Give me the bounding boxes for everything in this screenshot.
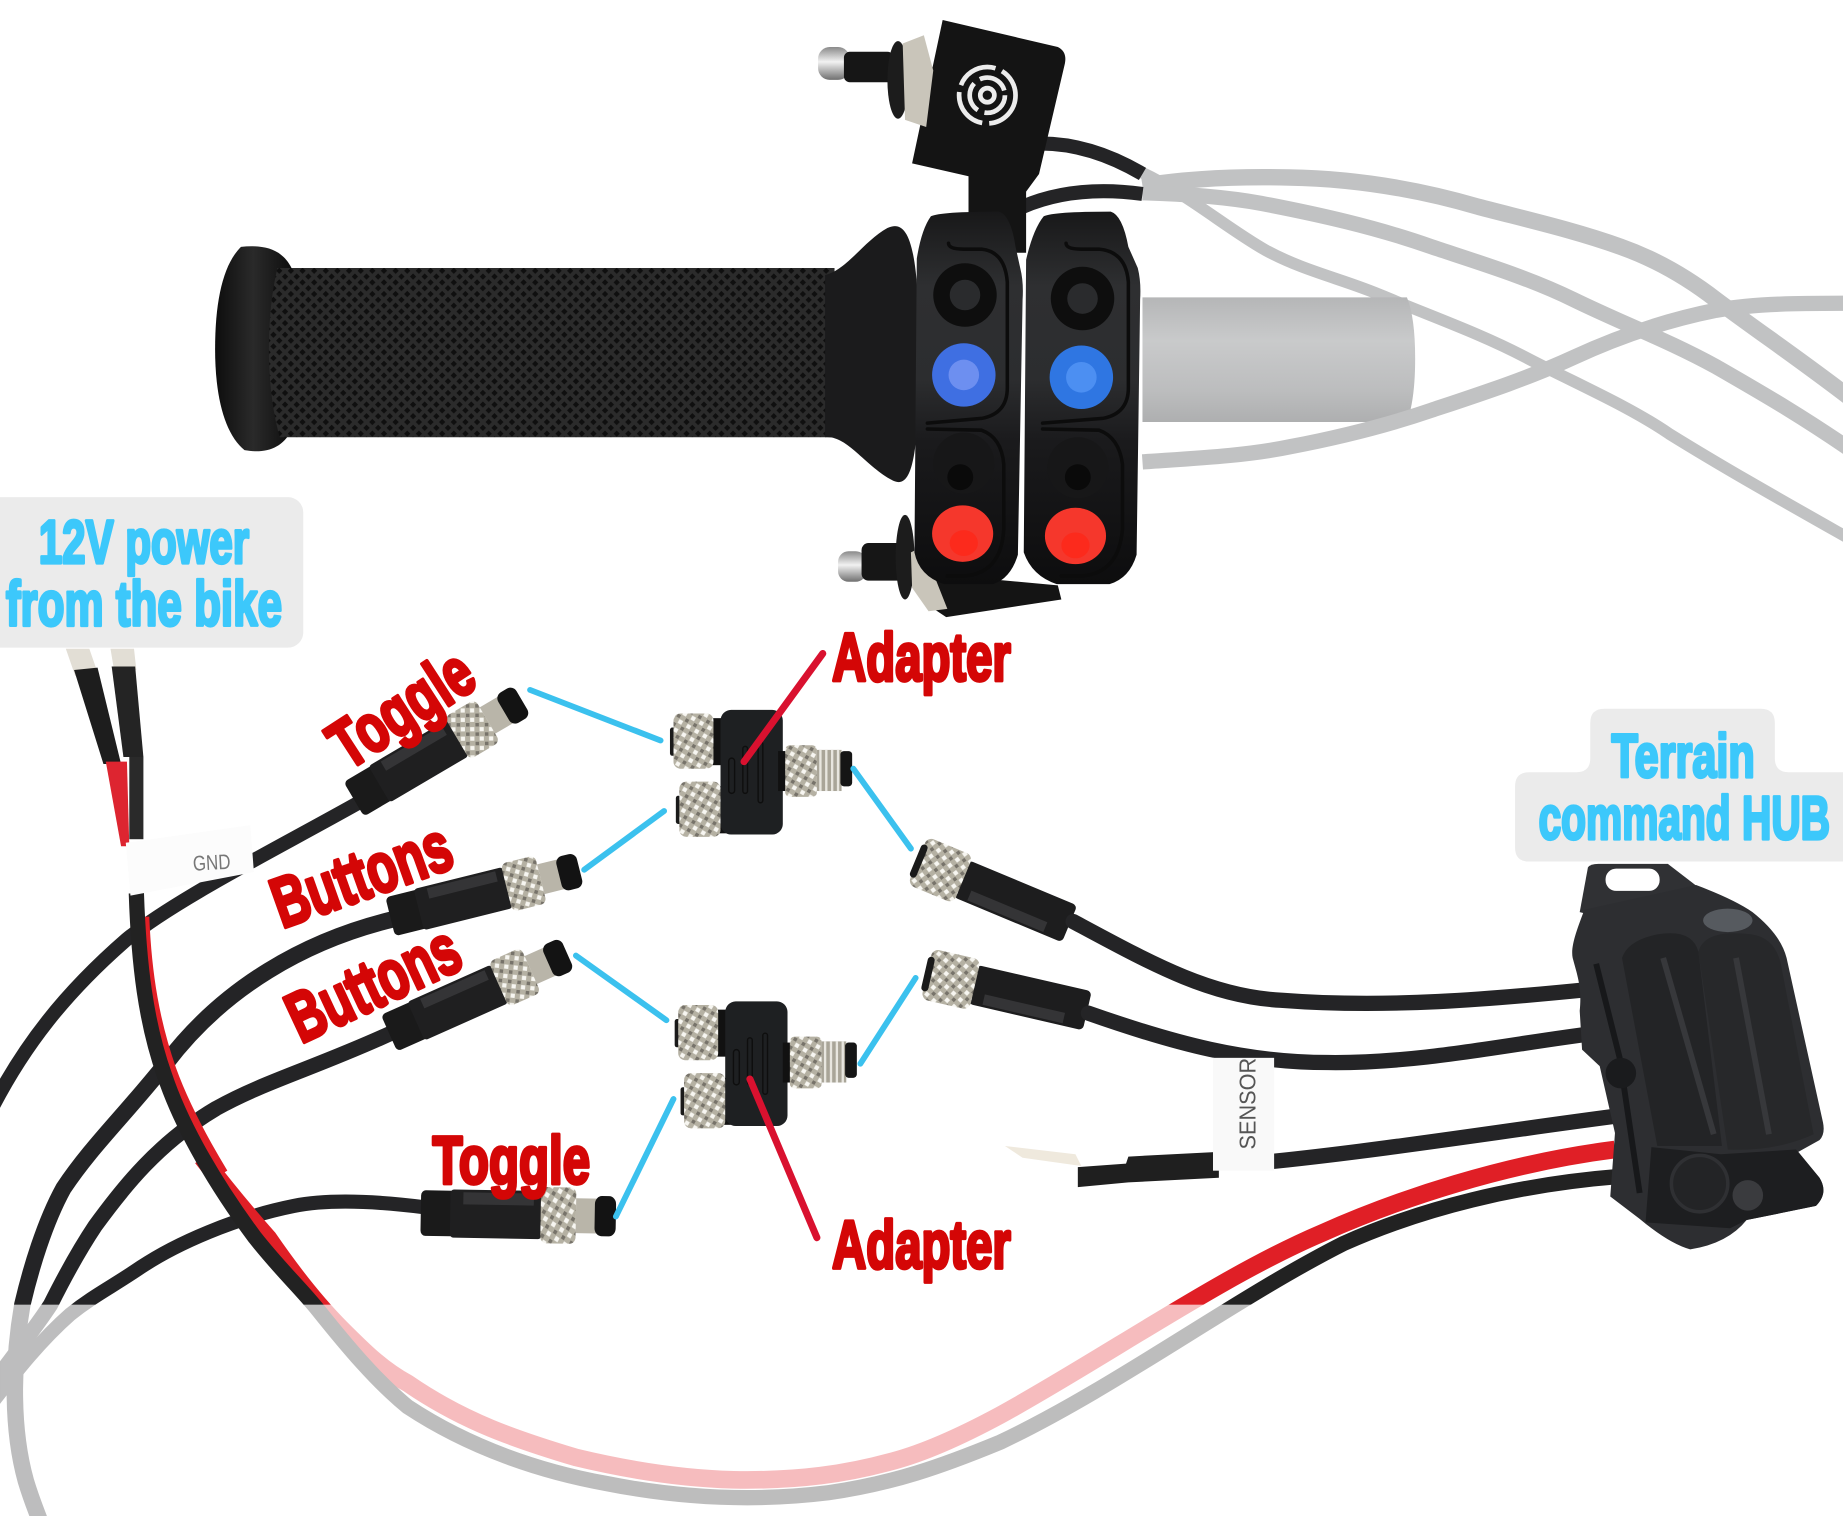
sensor label: SENSOR — [1234, 1058, 1260, 1150]
power cable black — [136, 893, 1618, 1498]
black cables behind switch — [1023, 143, 1142, 207]
fade overlay — [0, 1305, 1843, 1516]
mount block — [917, 552, 1061, 617]
button blue — [1050, 346, 1113, 409]
rubber collar — [887, 41, 909, 119]
adapter upper — [670, 710, 852, 837]
blue links — [530, 690, 916, 1217]
logo — [959, 67, 1016, 123]
left battery lobe — [1622, 933, 1722, 1146]
connector: hub lead 2 — [919, 948, 1093, 1036]
right battery lobe — [1698, 933, 1814, 1150]
hub small knob — [1733, 1180, 1763, 1211]
pin boot — [862, 543, 904, 581]
connector: buttons 2 — [379, 931, 577, 1056]
label: Toggle upper: Toggle — [315, 634, 488, 784]
button dark — [1047, 437, 1108, 498]
grey photo cable behind tube — [1142, 173, 1843, 543]
grey photo cables, upper right — [1142, 177, 1843, 462]
buttons cable 2 — [0, 1032, 394, 1387]
left switch housing — [914, 212, 1023, 584]
hub logo — [1671, 1155, 1728, 1212]
button red — [1045, 508, 1106, 564]
housing inner contour — [1043, 243, 1128, 423]
side slot — [1596, 964, 1640, 1193]
mount tab — [1580, 864, 1698, 929]
grip — [215, 226, 919, 482]
label: Buttons upper: Buttons — [261, 806, 462, 943]
bottom toggle switch — [838, 515, 1061, 617]
adapter pointer lower — [750, 1079, 817, 1238]
label: Terrain command HUB: Terrain — [1611, 722, 1755, 790]
button black — [1051, 267, 1114, 330]
hex nut — [903, 35, 933, 127]
mount block — [912, 20, 1065, 253]
connector: toggle 1 — [341, 679, 534, 821]
button black — [933, 263, 997, 327]
label: Terrain command HUB — [1515, 709, 1843, 862]
shrink tube — [1078, 1152, 1219, 1187]
hex nut — [911, 547, 947, 611]
tab hole — [1606, 869, 1660, 891]
label: Adapter lower: Adapter — [832, 1207, 1011, 1283]
button dark — [933, 433, 994, 494]
terminal — [1005, 1146, 1081, 1166]
top toggle switch — [818, 20, 1065, 253]
terminals — [66, 649, 136, 676]
power cable red, thin upper run — [145, 917, 223, 1173]
side bump — [1606, 1058, 1636, 1088]
button blue — [932, 343, 996, 407]
connector: hub lead 1 — [906, 836, 1080, 948]
hub button — [1703, 909, 1752, 932]
pin boot — [844, 52, 893, 82]
lower module — [1646, 1147, 1823, 1228]
connector: toggle 2 — [420, 1185, 616, 1245]
sensor label — [1213, 1058, 1274, 1171]
shrink tubes — [74, 668, 121, 764]
connector: buttons 1 — [384, 846, 586, 941]
power lead pair — [66, 649, 143, 846]
GND wire label — [126, 825, 254, 896]
hub leads — [1073, 921, 1613, 1161]
grip flange — [215, 246, 291, 451]
power cable red, main run — [202, 1150, 1615, 1480]
buttons cable 1 — [15, 919, 394, 1516]
right switch housing — [1024, 212, 1140, 584]
adapter pointer upper — [744, 654, 823, 762]
rubber collar — [896, 515, 914, 599]
label: Adapter upper: Adapter — [832, 620, 1011, 696]
hub body — [1572, 885, 1824, 1249]
grey throttle tube — [1142, 297, 1415, 422]
label: 12V power: from the bike — [6, 569, 282, 639]
toggle cable 1 — [0, 803, 358, 1111]
sensor stub — [1005, 1146, 1219, 1187]
GND wire label: GND — [192, 851, 231, 876]
black lead — [129, 757, 143, 839]
label: 12V power: 12V power — [39, 508, 249, 576]
label: Buttons lower: Buttons — [274, 909, 472, 1057]
button red — [932, 505, 993, 562]
grip bell — [825, 226, 919, 482]
chrome pin — [818, 47, 850, 80]
label: 12V power — [0, 497, 303, 648]
red lead — [106, 762, 129, 846]
adapter lower — [675, 1001, 857, 1128]
housing inner contour — [927, 243, 1007, 423]
knurled grip body — [269, 268, 835, 437]
terrain command hub — [1572, 864, 1824, 1249]
highlights — [1663, 958, 1714, 1134]
toggle cable 2 — [0, 1202, 423, 1405]
chrome pin — [838, 551, 866, 582]
label: Toggle lower: Toggle — [433, 1123, 590, 1199]
